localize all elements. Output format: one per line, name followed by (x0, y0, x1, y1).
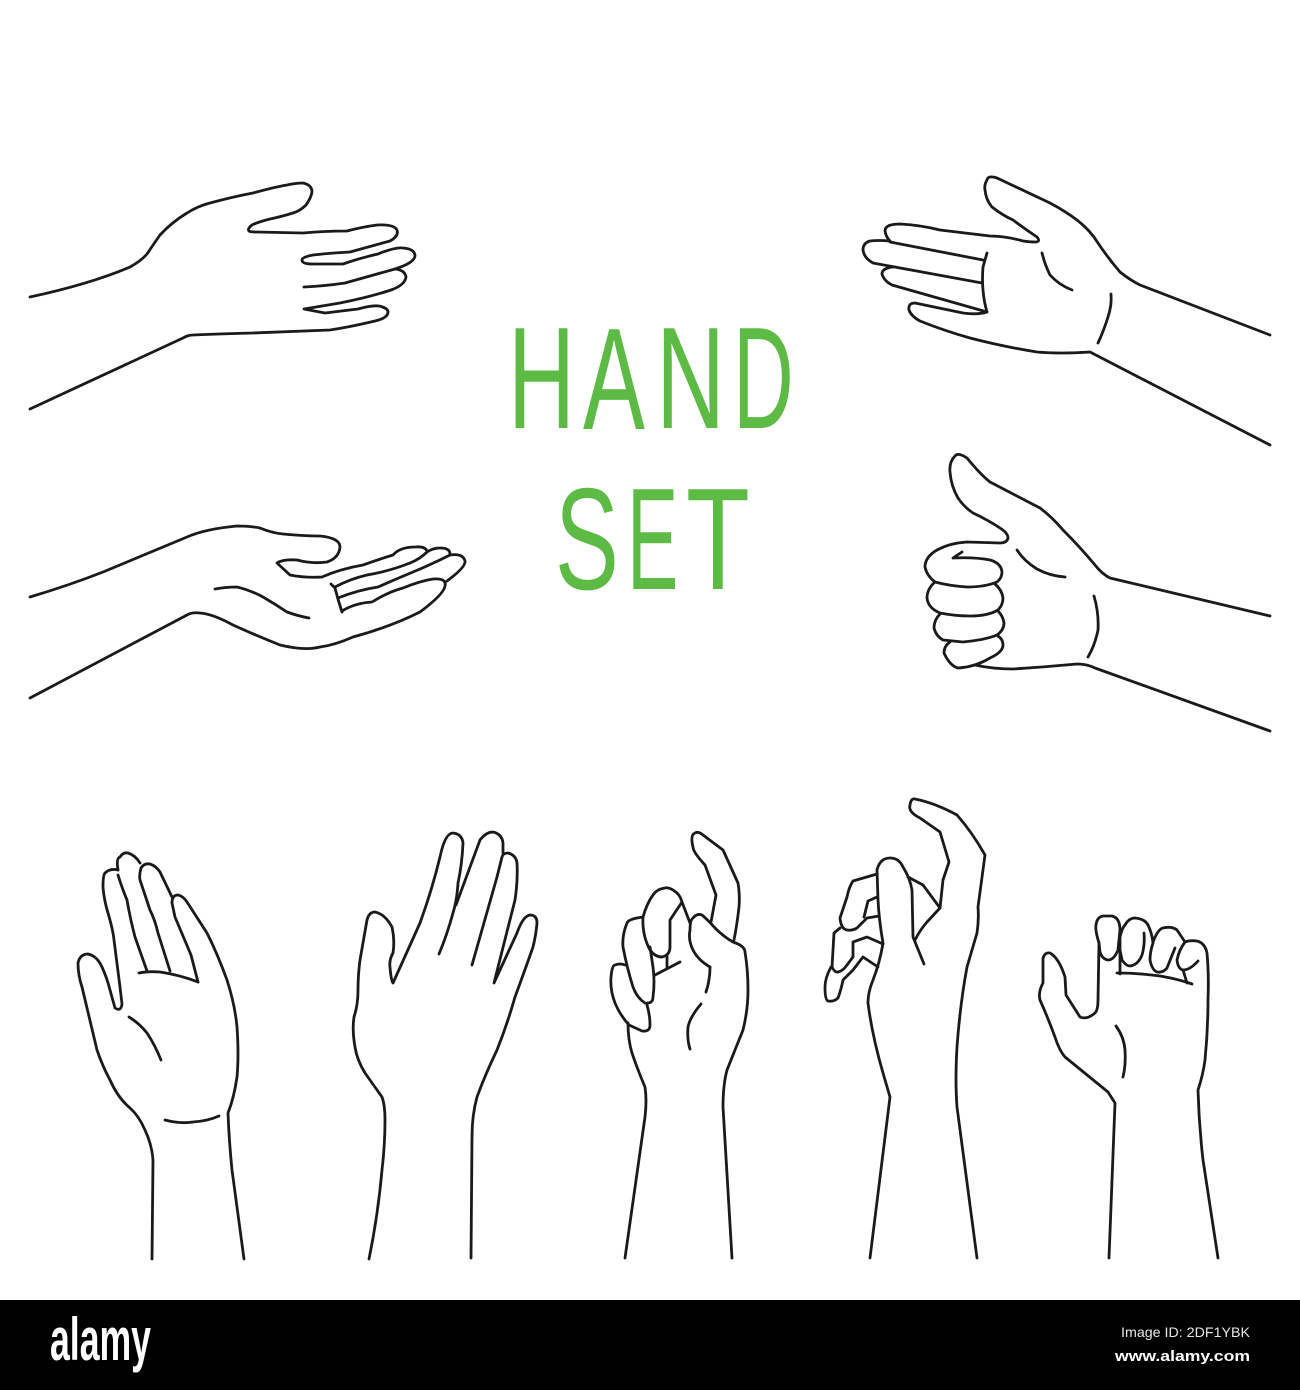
icon: raised bent hand seen from the side (825, 799, 985, 1258)
footer website: www.alamy.com (1114, 1348, 1250, 1365)
title: HAND SET: N (656, 298, 725, 460)
icon: raised open palm, fingers together (78, 853, 244, 1259)
title: HAND SET: H (508, 297, 575, 459)
icon: thumbs up hand (925, 454, 1270, 731)
title: HAND SET: S (555, 459, 619, 621)
title: HAND SET: E (627, 458, 678, 620)
icon: open hand, back view, reaching right (30, 183, 415, 409)
title: HAND SET: D (733, 298, 794, 460)
icon: raised hand, back view, fingers spread (353, 832, 537, 1259)
footer logo: alamy: alamy (50, 1306, 151, 1373)
title: HAND SET (508, 297, 794, 621)
icon: raised fist with thumb out (1039, 916, 1218, 1258)
icon: raised hand with curled fingers (611, 832, 748, 1258)
title: HAND SET: T (686, 458, 750, 620)
icon: open palm reaching left (863, 177, 1270, 445)
footer bar (0, 1300, 1300, 1390)
title: HAND SET: A (583, 298, 645, 460)
icon: open cupped palm reaching right (30, 526, 465, 698)
footer image id: Image ID: 2DF1YBK (1121, 1324, 1251, 1340)
